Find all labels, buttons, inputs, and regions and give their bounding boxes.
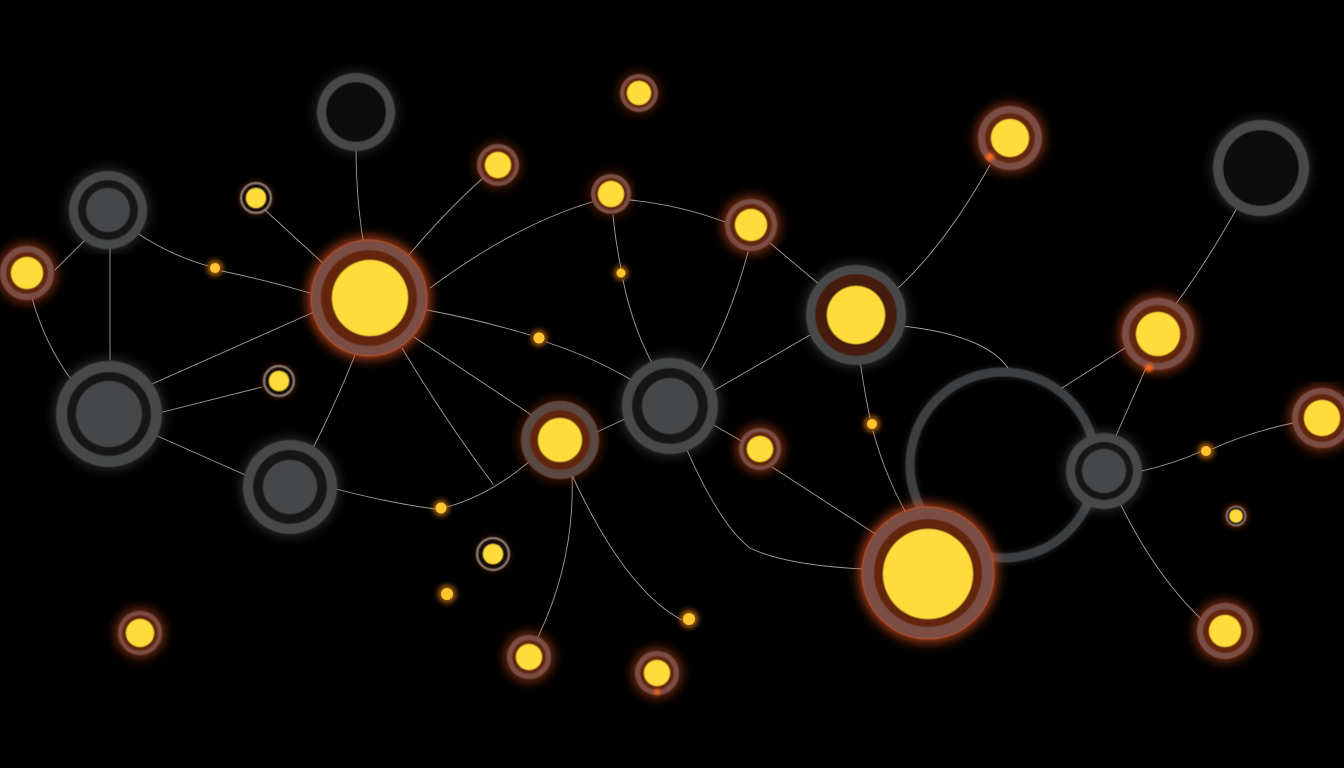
grey hub: left large (54, 359, 164, 469)
large open ring (910, 372, 1096, 558)
large yellow node: left (308, 237, 430, 359)
yellow node: far right (1290, 386, 1344, 450)
yellow node: bottom centre left (505, 633, 553, 681)
grey hub: dark top (316, 72, 396, 152)
yellow node: right (1120, 296, 1196, 372)
connecting lines (32, 147, 1293, 637)
grey hub: centre (620, 356, 720, 456)
small ringed node: left centre (262, 364, 296, 398)
small ringed node: upper left (239, 181, 273, 215)
small ringed node: lower centre (475, 536, 511, 572)
grey-rimmed yellow node: upper middle (804, 263, 908, 367)
yellow node: upper centre right (723, 197, 779, 253)
grey hub: top left (67, 169, 149, 251)
yellow node: top right (976, 104, 1044, 172)
junction dots (207, 260, 1214, 628)
yellow node: bottom right (1195, 601, 1255, 661)
yellow node: centre right (737, 426, 783, 472)
grey hub: right (1064, 431, 1144, 511)
yellow node: upper centre (590, 173, 632, 215)
yellow node: bottom left (116, 609, 164, 657)
yellow node: bottom centre (633, 649, 681, 697)
small ringed node: right (1224, 504, 1248, 528)
grey hub: lower left (241, 438, 339, 536)
largest yellow node: lower right (859, 504, 997, 642)
grey-rimmed yellow node: centre (520, 400, 600, 480)
yellow node: far left (0, 244, 56, 302)
yellow node: upper centre left (476, 143, 520, 187)
grey hub: dark top right (1212, 119, 1310, 217)
yellow node: top centre (619, 73, 659, 113)
